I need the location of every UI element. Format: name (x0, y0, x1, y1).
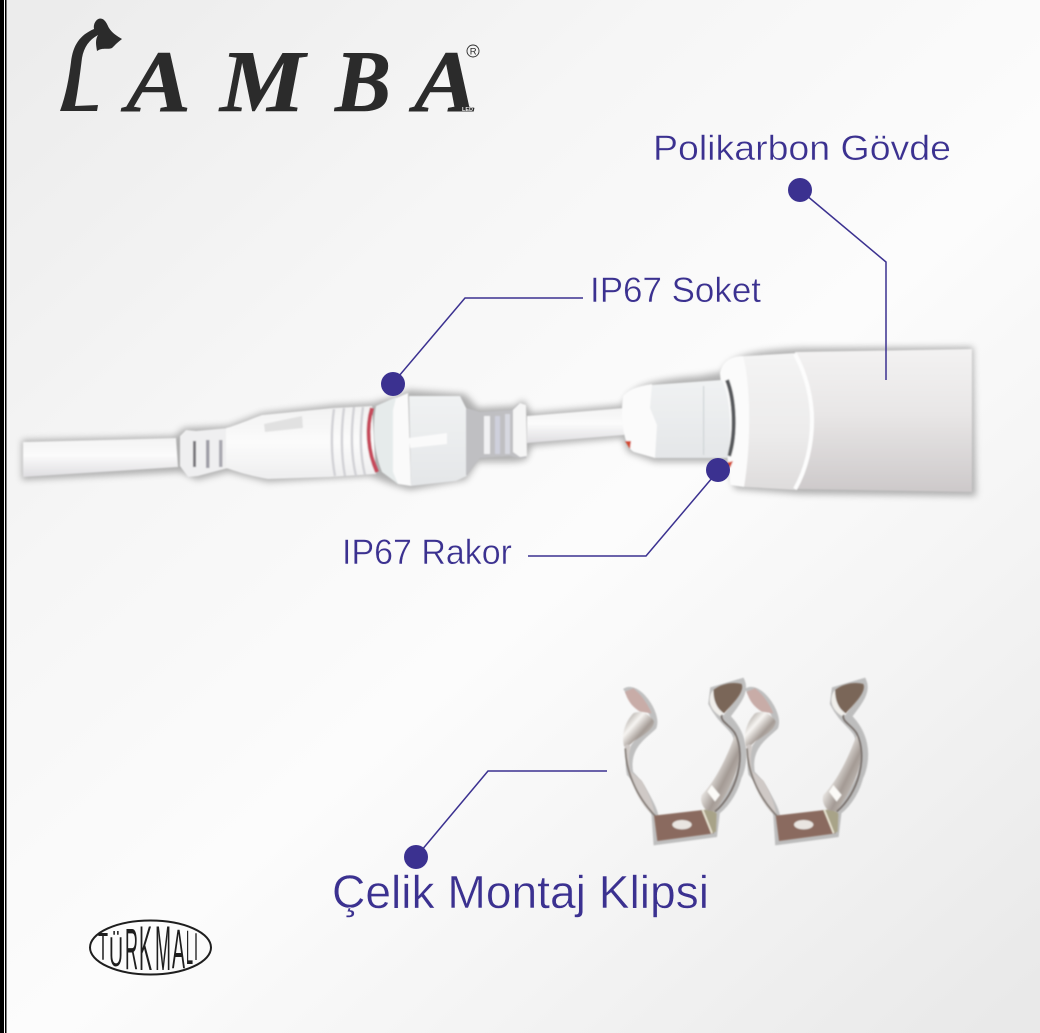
left edge bars (0, 0, 6, 1033)
icon: desk lamp letter L (60, 18, 122, 111)
badge lettering: L (186, 922, 193, 975)
logo wordmark: B (334, 34, 391, 131)
gland red mark (726, 461, 733, 468)
badge lettering: A (172, 919, 185, 980)
leader line (416, 771, 607, 857)
label: Polikarbon Gövde (653, 128, 951, 168)
label: IP67 Soket (590, 270, 761, 310)
led mark: LED (462, 107, 473, 113)
logo wordmark: A (120, 34, 191, 131)
locking nut (409, 396, 467, 486)
plug body (226, 406, 376, 479)
locking flange (393, 393, 411, 486)
callout: IP67 Soket (381, 270, 761, 396)
label: IP67 Rakor (342, 532, 512, 572)
badge lettering: M (155, 915, 171, 984)
badge lettering: R (125, 916, 138, 982)
badge outline (90, 920, 211, 974)
cable left (23, 438, 178, 477)
nut pin (409, 433, 447, 448)
right clip (745, 683, 864, 841)
seal collar (374, 397, 398, 484)
callout: Polikarbon Gövde (653, 128, 951, 380)
polycarbonate body tube (795, 349, 972, 492)
callout: IP67 Rakor (342, 458, 730, 572)
leader line (800, 190, 886, 380)
rear ribbed relief (466, 403, 527, 476)
ribbed strain relief left (180, 428, 228, 477)
badge: Türk Malı (90, 915, 211, 984)
registered mark (467, 45, 479, 58)
registered mark: R (470, 46, 477, 58)
connector shadow (22, 347, 976, 496)
logo wordmark: M (218, 34, 308, 131)
leader line (528, 471, 718, 556)
marker dot (381, 372, 405, 396)
clip shadows (625, 682, 865, 842)
logo wordmark: A (409, 34, 478, 131)
badge lettering: K (139, 915, 152, 984)
cap white rims (720, 356, 749, 487)
product photo: cable and connector (22, 347, 976, 496)
badge lettering: T (98, 925, 108, 969)
dark gasket (727, 380, 734, 456)
end cap (720, 353, 814, 490)
leader line (393, 298, 583, 383)
badge lettering (98, 915, 198, 984)
badge: Türk Malı: I (194, 925, 198, 969)
badge lettering: Ü (109, 928, 123, 975)
label: Çelik Montaj Klipsi (332, 866, 709, 918)
rakor cable gland (622, 380, 730, 458)
marker dot (706, 458, 730, 482)
product photo: steel mounting clips (623, 682, 865, 842)
red seal ring (369, 408, 377, 472)
marker dot (788, 178, 812, 202)
logo: Lamba LED (60, 18, 479, 131)
thread rings (332, 407, 365, 476)
callout: Çelik Montaj Klipsi (332, 771, 709, 918)
marker dot (404, 845, 428, 869)
left clip (623, 683, 742, 841)
logo wordmark (120, 34, 478, 131)
cable right (527, 408, 624, 443)
plug grip ridges (264, 416, 303, 432)
